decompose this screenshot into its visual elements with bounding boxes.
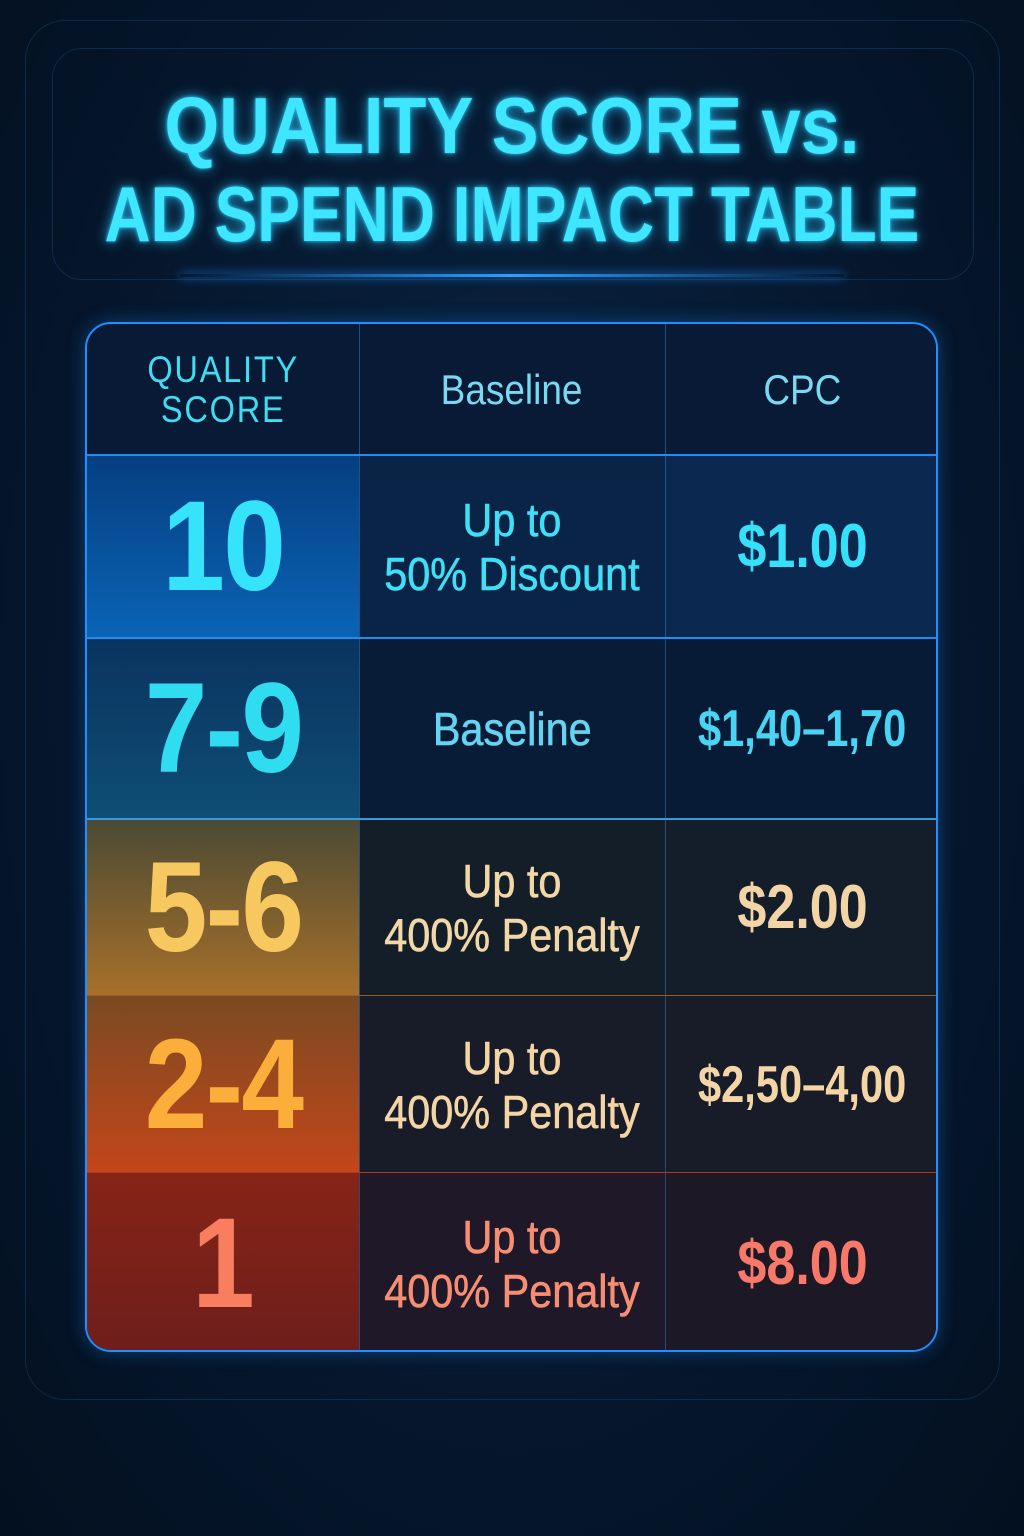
header row (87, 324, 940, 455)
penalty: 400% Penalty (384, 908, 640, 960)
row 1 (87, 1173, 940, 1354)
baseline: discount: Up to (463, 494, 561, 546)
score 1 (87, 1173, 359, 1354)
penalty (359, 996, 665, 1173)
score 2-4: 2-4 (144, 1013, 302, 1156)
cpc $1.00: $1.00 (737, 512, 868, 581)
penalty: Up to (463, 854, 561, 906)
score 10: 10 (162, 475, 284, 618)
row 5-6 (87, 819, 940, 996)
header: quality score (147, 348, 299, 430)
cpc $1.00 (665, 455, 940, 638)
header: cpc: CPC (763, 366, 842, 412)
penalty: 400% Penalty (384, 1086, 640, 1138)
cpc $2.00 (665, 819, 940, 996)
score 1: 1 (193, 1192, 253, 1335)
score 10 (87, 455, 359, 638)
header: baseline: Baseline (441, 366, 583, 412)
cpc range (665, 638, 940, 819)
title line 1: QUALITY SCORE vs. (164, 81, 860, 170)
score 7-9: 7-9 (144, 657, 302, 800)
table (85, 322, 938, 1352)
penalty (359, 819, 665, 996)
baseline: discount (359, 455, 665, 638)
score 5-6 (87, 819, 359, 996)
baseline: Baseline (433, 702, 591, 754)
cpc range (665, 996, 940, 1173)
cpc $8.00: $8.00 (737, 1229, 868, 1298)
cpc $8.00 (665, 1173, 940, 1354)
score 7-9 (87, 638, 359, 819)
title (98, 81, 925, 258)
baseline (359, 638, 665, 819)
baseline: discount: 50% Discount (384, 548, 640, 600)
cpc $2.00: $2.00 (737, 873, 868, 942)
score 2-4 (87, 996, 359, 1173)
penalty: Up to (463, 1210, 561, 1262)
title line 2: AD SPEND IMPACT TABLE (105, 170, 919, 258)
penalty (359, 1173, 665, 1354)
cpc range: $1,40–1,70 (698, 700, 907, 758)
row 10 (87, 455, 940, 638)
penalty: Up to (463, 1032, 561, 1084)
score 5-6: 5-6 (144, 836, 302, 979)
header: quality score: QUALITY (147, 348, 299, 390)
row 2-4 (87, 996, 940, 1173)
row 7-9 (87, 638, 940, 819)
header: quality score: SCORE (161, 388, 285, 430)
cpc range: $2,50–4,00 (698, 1056, 907, 1114)
penalty: 400% Penalty (384, 1264, 640, 1316)
